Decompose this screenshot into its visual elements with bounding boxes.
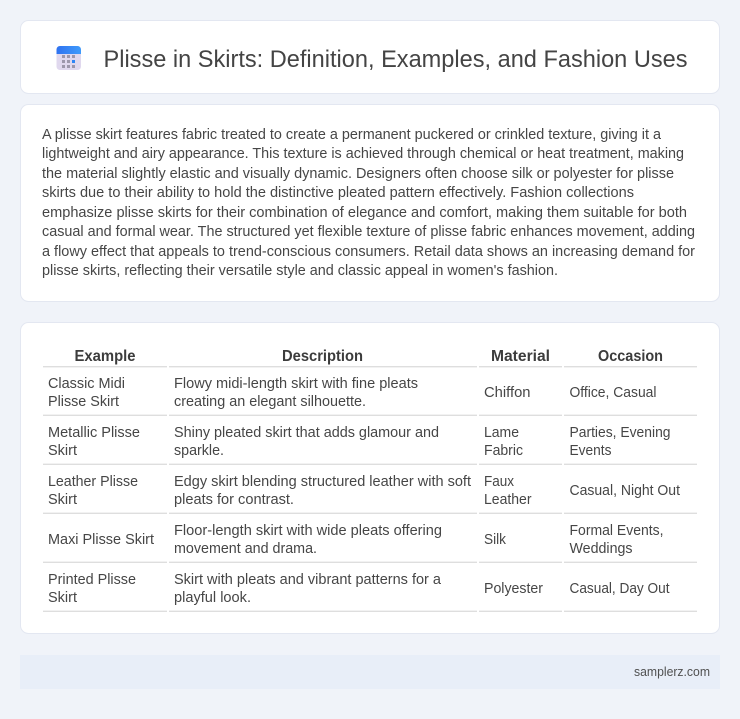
table row: Printed Plisse Skirt (43, 572, 697, 612)
table row: Maxi Plisse Skirt: Maxi Plisse Skirt (48, 532, 154, 548)
table row: Metallic Plisse Skirt: Metallic Plisse (48, 425, 140, 441)
table row: Metallic Plisse Skirt: sparkle. (174, 443, 224, 459)
text block: description of plisse skirts: emphasize plisse skirts for their combination of elegance and comfort, making them suitable for both (42, 205, 687, 221)
panel: page header (20, 20, 720, 94)
text block: description of plisse skirts: a flowy effect that appeals to trend-conscious consumers. Retail data shows an increasing demand for (42, 244, 695, 260)
table row: Maxi Plisse Skirt (43, 523, 697, 563)
table row: Leather Plisse Skirt: Faux (484, 474, 515, 490)
table row: Printed Plisse Skirt: Casual, Day Out (570, 581, 670, 597)
text block: description of plisse skirts: skirts due to their ability to hold the distinctive pleated pattern effectively. Fashion collections (42, 185, 634, 201)
table row: Classic Midi Plisse Skirt: Flowy midi-length skirt with fine pleats (174, 376, 418, 392)
footer bar (20, 655, 720, 689)
table row: Metallic Plisse Skirt: Parties, Evening (570, 425, 670, 441)
table row: Printed Plisse Skirt: Skirt with pleats and vibrant patterns for a (174, 572, 441, 588)
table row: Printed Plisse Skirt: playful look. (174, 590, 251, 606)
text block: description of plisse skirts: the material slightly elastic and visually dynamic. Designers often choose silk or polyester for plisse (42, 166, 674, 182)
table header row: Description (282, 348, 363, 365)
table row: Printed Plisse Skirt: Skirt (48, 590, 77, 606)
table header row: Example (74, 348, 136, 365)
text block: description of plisse skirts: A plisse skirt features fabric treated to create a permanent puckered or crinkled texture, giving it a (42, 127, 661, 143)
table row: Leather Plisse Skirt: Leather (484, 492, 532, 508)
table row: Maxi Plisse Skirt: movement and drama. (174, 541, 317, 557)
footer source text: samplerz.com (634, 665, 710, 679)
table row: Classic Midi Plisse Skirt: Office, Casual (570, 385, 656, 401)
panel: intro paragraph (20, 104, 720, 302)
table header row: Material (491, 348, 550, 365)
table row: Leather Plisse Skirt: Casual, Night Out (570, 483, 680, 499)
table row: Classic Midi Plisse Skirt: creating an elegant silhouette. (174, 394, 366, 410)
table row: Maxi Plisse Skirt: Floor-length skirt with wide pleats offering (174, 523, 442, 539)
table row: Maxi Plisse Skirt: Silk (484, 532, 507, 548)
table row: Metallic Plisse Skirt: Lame (484, 425, 519, 441)
table header row: Occasion (598, 348, 663, 365)
table row: Metallic Plisse Skirt (43, 425, 697, 465)
panel: examples table (20, 322, 720, 634)
text block: description of plisse skirts: lightweight and airy appearance. This texture is achieved through chemical or heat treatment, making (42, 146, 684, 162)
table row: Maxi Plisse Skirt: Formal Events, (570, 523, 664, 539)
icon: calendar (56, 46, 81, 70)
table header row (43, 348, 697, 367)
table row: Metallic Plisse Skirt: Events (570, 443, 612, 459)
table row: Leather Plisse Skirt (43, 474, 697, 514)
table row: Metallic Plisse Skirt: Shiny pleated skirt that adds glamour and (174, 425, 439, 441)
text block: description of plisse skirts: casual and formal wear. The structured yet flexible texture of plisse fabric enhances movement, adding (42, 224, 695, 240)
table row: Classic Midi Plisse Skirt: Plisse Skirt (48, 394, 119, 410)
table row: Classic Midi Plisse Skirt: Chiffon (484, 385, 530, 401)
table row: Metallic Plisse Skirt: Skirt (48, 443, 77, 459)
table row: Leather Plisse Skirt: Skirt (48, 492, 77, 508)
table row: Leather Plisse Skirt: pleats for contrast. (174, 492, 294, 508)
table row: Classic Midi Plisse Skirt: Classic Midi (48, 376, 125, 392)
text block: description of plisse skirts (42, 127, 695, 279)
title: Plisse in Skirts: Definition, Examples, and Fashion Uses (104, 46, 688, 73)
text block: description of plisse skirts: plisse skirts, reflecting their versatile style and classic appeal in women's fashion. (42, 263, 558, 279)
table row: Leather Plisse Skirt: Leather Plisse (48, 474, 138, 490)
table row: Printed Plisse Skirt: Polyester (484, 581, 543, 597)
table row: Printed Plisse Skirt: Printed Plisse (48, 572, 136, 588)
table row: Leather Plisse Skirt: Edgy skirt blending structured leather with soft (174, 474, 471, 490)
table row: Maxi Plisse Skirt: Weddings (570, 541, 632, 557)
table row: Classic Midi Plisse Skirt (43, 376, 697, 416)
table row: Metallic Plisse Skirt: Fabric (484, 443, 523, 459)
